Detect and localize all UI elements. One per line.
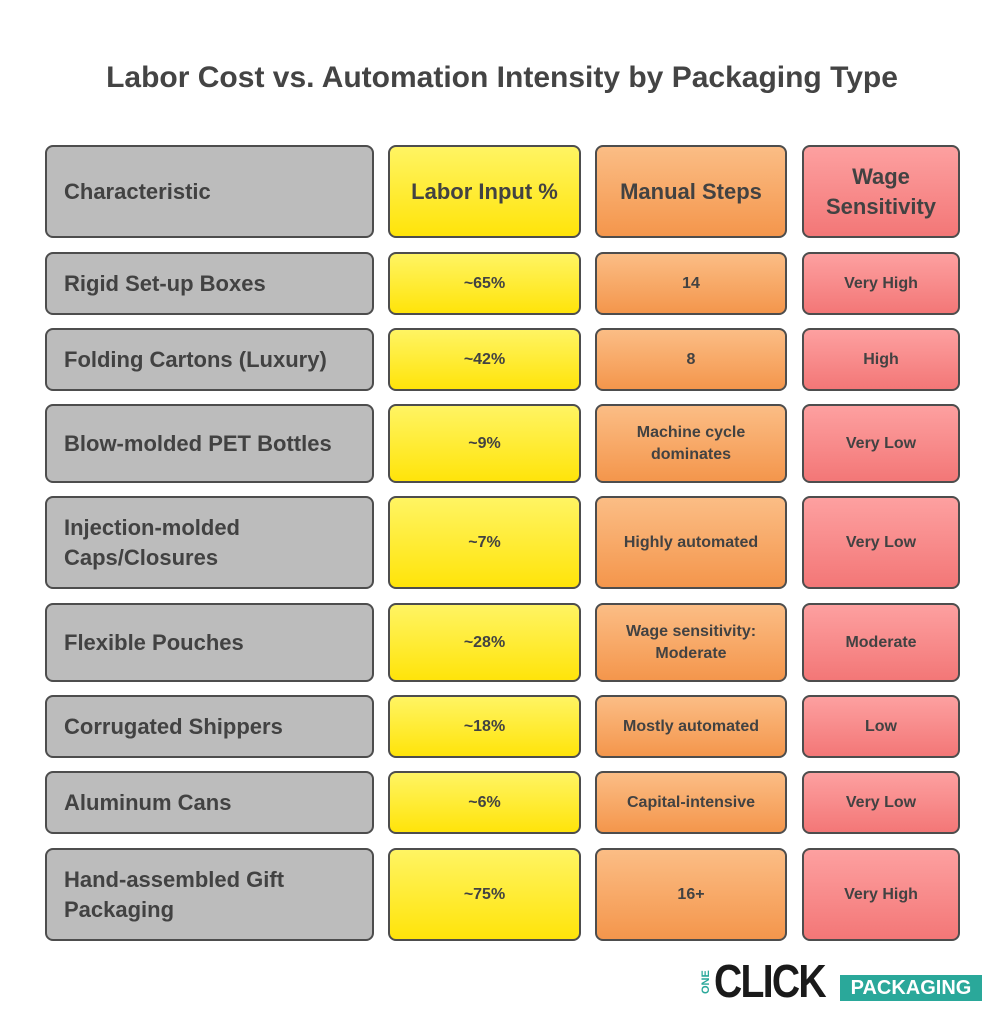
text: 8 <box>687 350 695 368</box>
text: 14 <box>682 274 700 292</box>
text: Very Low <box>846 794 916 810</box>
logo: One Click Packaging: CLICK <box>714 955 825 1007</box>
logo: One Click Packaging: ONE <box>700 970 712 994</box>
text: Very High <box>844 274 918 292</box>
text: ~9% <box>468 434 501 452</box>
row: rigid set-up boxes <box>45 252 960 315</box>
text: Blow-molded PET Bottles <box>64 430 332 456</box>
text: Moderate <box>845 634 917 650</box>
header: wage sensitivity: Sensitivity <box>826 194 936 218</box>
header: manual steps <box>595 145 787 238</box>
text: Very Low <box>846 534 916 550</box>
row: injection-molded caps <box>45 496 960 589</box>
header: wage sensitivity: Wage <box>852 164 910 188</box>
text: Moderate <box>655 644 727 662</box>
logo: One Click Packaging: PACKAGING <box>851 977 971 999</box>
row: hand-assembled gift packaging <box>45 848 960 941</box>
row: flexible pouches <box>45 603 960 682</box>
text: Caps/Closures <box>64 544 218 570</box>
header: manual steps: Manual Steps <box>620 178 762 204</box>
text: Hand-assembled Gift <box>64 866 284 892</box>
text: Mostly automated <box>623 718 759 734</box>
text: ~7% <box>468 534 501 550</box>
row: aluminum cans <box>45 771 960 834</box>
text: Capital-intensive <box>627 794 755 810</box>
text: 16+ <box>677 886 705 902</box>
header: labor input: Labor Input % <box>411 178 558 204</box>
text: Injection-molded <box>64 514 240 540</box>
text: Rigid Set-up Boxes <box>64 270 266 296</box>
header: wage sensitivity <box>802 145 960 238</box>
row: blow-molded PET <box>45 404 960 483</box>
text: Packaging <box>64 896 174 922</box>
text: Flexible Pouches <box>64 630 244 654</box>
text: ~6% <box>468 794 501 810</box>
header: characteristic <box>45 145 374 238</box>
title: Labor Cost vs. Automation Intensity by Packaging Type <box>106 61 898 94</box>
text: Highly automated <box>624 534 758 550</box>
header: labor input <box>388 145 581 238</box>
text: ~42% <box>464 350 505 368</box>
row: folding cartons <box>45 328 960 391</box>
text: ~75% <box>464 886 505 902</box>
text: Aluminum Cans <box>64 790 231 814</box>
text: Very Low <box>846 434 916 452</box>
text: Wage sensitivity: <box>626 622 756 640</box>
text: ~65% <box>464 274 505 292</box>
text: Folding Cartons (Luxury) <box>64 346 327 372</box>
logo: One Click Packaging <box>700 955 982 1007</box>
header row <box>45 145 960 238</box>
row: corrugated shippers <box>45 695 960 758</box>
text: High <box>863 350 899 368</box>
text: Corrugated Shippers <box>64 714 283 738</box>
text: Machine cycle <box>637 424 745 440</box>
text: Low <box>865 718 897 734</box>
text: dominates <box>651 446 731 462</box>
text: Very High <box>844 886 918 902</box>
header: characteristic: Characteristic <box>64 178 211 204</box>
text: ~18% <box>464 718 505 734</box>
text: ~28% <box>464 634 505 650</box>
